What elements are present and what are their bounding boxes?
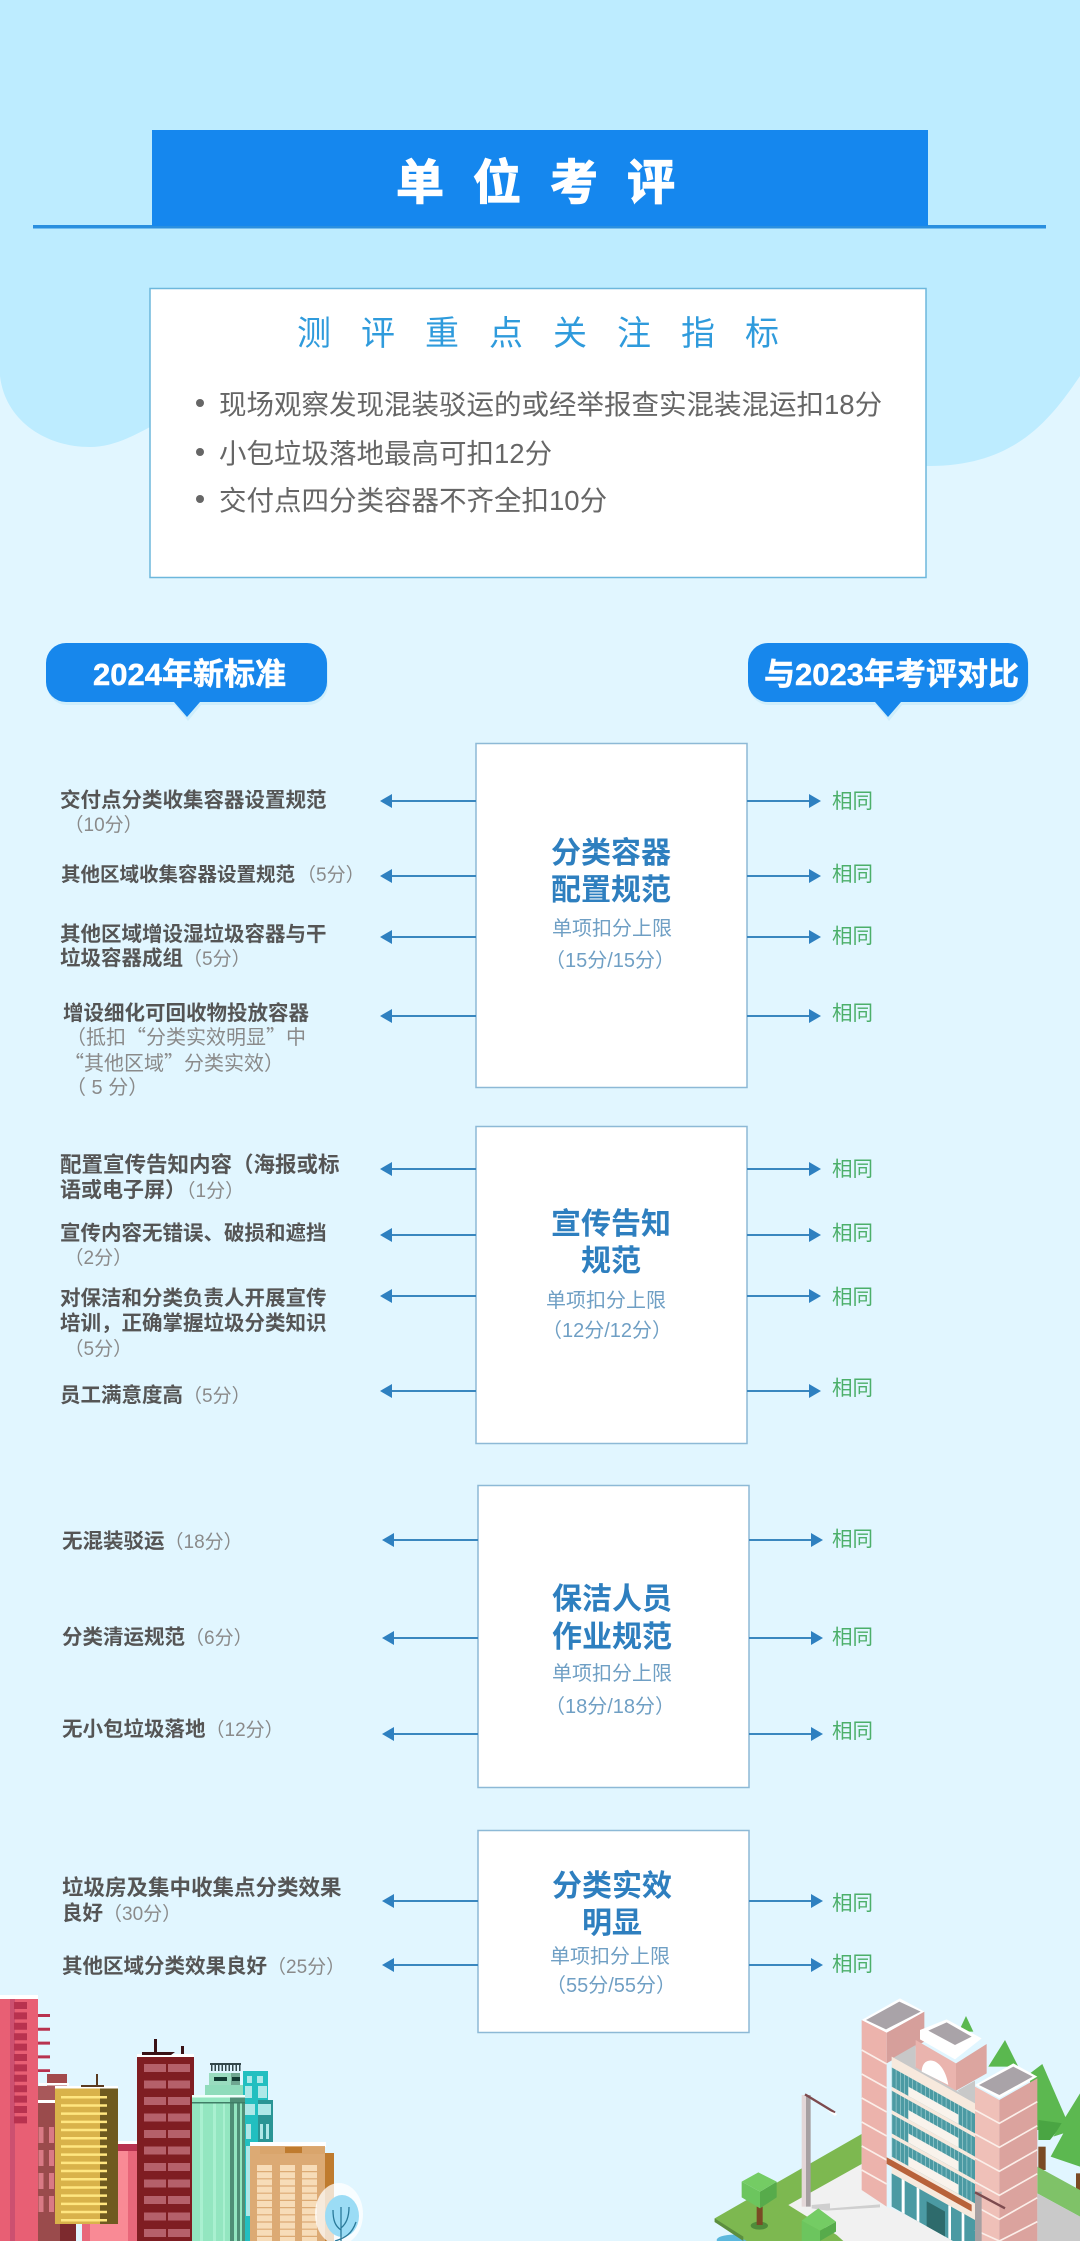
icon: small tree	[315, 2183, 363, 2241]
criteria text: 交付点分类收集容器设置规范	[60, 788, 326, 812]
tall pink tower	[0, 1995, 44, 2241]
glass facade	[887, 2054, 975, 2241]
bullet list: 现场观察发现混装驳运的或经举报查实混装混运扣18分	[219, 389, 882, 420]
comparison labels: 相同	[832, 1002, 873, 1025]
illustration: isometric office building right	[715, 1998, 1080, 2241]
comparison labels: 相同	[832, 1286, 873, 1309]
arrows left	[380, 1162, 476, 1398]
arrows right	[747, 794, 821, 1023]
criteria text: 良好（30分）	[62, 1901, 181, 1925]
arrows right	[749, 1894, 823, 1972]
category box: （12分/12分）	[542, 1319, 672, 1342]
criteria text: （2分）	[64, 1247, 132, 1269]
criteria text: 其他区域收集容器设置规范（5分）	[61, 863, 365, 886]
title banner	[33, 130, 1046, 228]
section: 分类容器配置规范	[60, 744, 873, 1099]
comparison labels: 相同	[832, 1377, 873, 1400]
criteria text	[60, 788, 365, 1099]
criteria text: 语或电子屏）（1分）	[60, 1178, 244, 1202]
category box	[478, 1830, 749, 2032]
section: 分类实效明显	[62, 1830, 873, 2032]
comparison labels: 相同	[832, 1626, 873, 1649]
comparison labels: 相同	[832, 1720, 873, 1743]
background trees	[959, 2016, 1080, 2241]
illustration: city buildings left	[0, 1995, 363, 2241]
comparison labels	[832, 1158, 873, 1400]
category box: 单项扣分上限	[550, 1945, 670, 1968]
criteria text	[62, 1875, 345, 1978]
category box: 单项扣分上限	[552, 1662, 672, 1685]
category box: 单项扣分上限	[552, 917, 672, 940]
criteria text: 增设细化可回收物投放容器	[63, 1001, 309, 1025]
criteria text: 其他区域增设湿垃圾容器与干	[60, 922, 326, 946]
brown building	[33, 2074, 76, 2241]
category box	[476, 1126, 747, 1444]
callout: compared with 2023	[748, 643, 1029, 721]
section: 宣传告知规范	[60, 1126, 873, 1444]
criteria text	[60, 1152, 340, 1407]
ground	[715, 2134, 973, 2241]
yellow building	[55, 2074, 118, 2224]
criteria text: 无混装驳运（18分）	[62, 1530, 243, 1553]
criteria text: （5分）	[64, 1338, 132, 1360]
category box: 配置规范	[551, 874, 671, 907]
callout: compared with 2023: 与2023年考评对比	[764, 657, 1019, 692]
panel: key indicators	[150, 288, 926, 578]
criteria text: 其他区域分类效果良好（25分）	[62, 1954, 345, 1978]
bullet list	[196, 389, 882, 516]
comparison labels: 相同	[832, 863, 873, 886]
street lamps	[802, 2094, 1005, 2241]
category box: （18分/18分）	[545, 1695, 675, 1718]
criteria text: 垃圾房及集中收集点分类效果	[62, 1875, 342, 1900]
category box	[478, 1486, 749, 1788]
comparison labels: 相同	[832, 1953, 873, 1976]
comparison labels	[832, 1528, 873, 1743]
criteria text: （ 5 分）	[66, 1076, 148, 1099]
category box: 分类实效	[552, 1870, 672, 1903]
criteria text: 对保洁和分类负责人开展宣传	[60, 1286, 326, 1310]
criteria text: 员工满意度高（5分）	[60, 1383, 251, 1407]
comparison labels: 相同	[832, 925, 873, 948]
mint building	[192, 2063, 245, 2241]
comparison labels	[832, 790, 873, 1025]
criteria text	[62, 1530, 284, 1741]
tan building	[250, 2142, 334, 2241]
criteria text: 垃圾容器成组（5分）	[60, 946, 251, 970]
arrows left	[380, 794, 476, 1023]
criteria text: 分类清运规范（6分）	[62, 1626, 253, 1649]
comparison labels	[832, 1892, 873, 1976]
criteria text: （抵扣“分类实效明显”中	[66, 1021, 306, 1050]
arrows left	[382, 1533, 478, 1741]
callout: 2024 new standard	[46, 643, 328, 721]
category box: （55分/55分）	[546, 1974, 676, 1997]
comparison labels: 相同	[832, 1528, 873, 1551]
left tower	[862, 1998, 924, 2207]
category box: 规范	[581, 1245, 641, 1278]
roof and central block	[892, 2019, 987, 2108]
teal building	[243, 2071, 273, 2241]
arrows left	[382, 1894, 478, 1972]
comparison labels: 相同	[832, 790, 873, 813]
panel heading: 测评重点关注指标	[297, 315, 809, 353]
arrows right	[749, 1533, 823, 1741]
callout: 2024 new standard: 2024年新标准	[93, 657, 286, 692]
small cube trees	[742, 2172, 836, 2241]
criteria text: （10分）	[64, 814, 143, 836]
category box: 宣传告知	[551, 1208, 671, 1241]
comparison labels: 相同	[832, 1892, 873, 1915]
category box: 保洁人员	[552, 1583, 672, 1616]
section: 保洁人员作业规范	[62, 1486, 873, 1788]
comparison labels: 相同	[832, 1158, 873, 1181]
criteria text: 培训，正确掌握垃圾分类知识	[60, 1311, 326, 1335]
category box: 单项扣分上限	[546, 1289, 666, 1312]
criteria text: 配置宣传告知内容（海报或标	[60, 1152, 340, 1177]
bullet list: 小包垃圾落地最高可扣12分	[219, 438, 552, 469]
criteria text: “其他区域”分类实效）	[64, 1047, 284, 1076]
title text: 单位考评	[396, 157, 704, 210]
bullet list: 交付点四分类容器不齐全扣10分	[219, 485, 607, 516]
category box: 作业规范	[552, 1621, 672, 1654]
category box: （15分/15分）	[545, 949, 675, 972]
short pink building	[82, 2141, 137, 2241]
criteria text: 无小包垃圾落地（12分）	[62, 1717, 284, 1741]
right tower	[975, 2063, 1037, 2241]
category box: 明显	[582, 1907, 642, 1940]
comparison labels: 相同	[832, 1222, 873, 1245]
category box: 分类容器	[551, 837, 671, 870]
criteria text: 宣传内容无错误、破损和遮挡	[60, 1221, 326, 1245]
category box	[476, 744, 747, 1088]
dark red building	[137, 2039, 194, 2241]
arrows right	[747, 1162, 821, 1398]
